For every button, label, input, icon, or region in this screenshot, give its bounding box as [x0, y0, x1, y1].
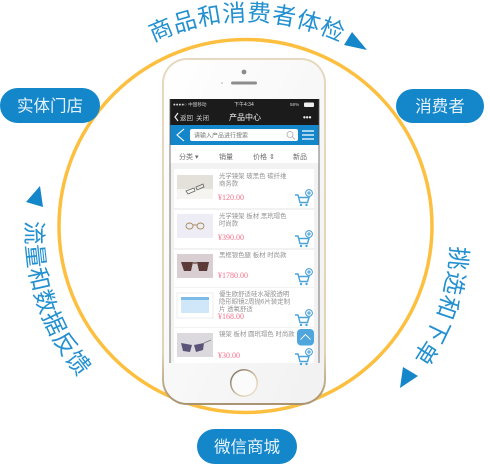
- scroll-to-top button: [297, 329, 314, 346]
- product 5: 镜架 板材 圆玳瑁色 时尚款: [219, 329, 295, 338]
- filter tabs: 销量: [219, 152, 233, 161]
- status bar and title bar: ●●●●○ 中国移动: [173, 101, 207, 108]
- status bar and title bar: 下午4:34: [234, 101, 254, 108]
- filter tabs: 价格 ⇕: [253, 152, 275, 161]
- product 2: 时尚款: [219, 218, 239, 228]
- status bar and title bar: 返回: [180, 114, 193, 122]
- product 4: 優生欧舒适硅水凝胶透明: [219, 289, 289, 298]
- product 4: 隐形眼镜2周抛6片装定制: [219, 296, 290, 306]
- curved heading: right: 挑选和下单: [415, 247, 470, 364]
- status bar and title bar: 58%: [290, 102, 299, 107]
- arrow: left: [26, 186, 43, 207]
- phone body: [162, 58, 326, 405]
- curved heading: left: 流量和数据反馈: [24, 222, 92, 376]
- product 4: ¥168.00: [218, 312, 244, 321]
- product 5: [174, 328, 314, 365]
- speaker: [221, 82, 257, 84]
- search bar: 请输入产品进行搜索: [194, 132, 248, 140]
- screen: [170, 99, 319, 365]
- pill: consumers: [396, 89, 484, 123]
- filter tabs: 分类 ▾: [179, 152, 199, 161]
- screen frame sides: [170, 99, 319, 363]
- product 1: 商务款: [219, 178, 239, 188]
- product 1: 光学镜架 玻黑色 碳纤维: [219, 171, 287, 180]
- yellow ring: [59, 40, 432, 412]
- camera: [242, 70, 246, 74]
- product 3: 黑框银色腿 板材 时尚款: [219, 250, 287, 259]
- pill: physical store: [0, 88, 100, 123]
- product 1: [174, 169, 314, 208]
- phone: [162, 58, 326, 405]
- product 4: [174, 288, 314, 327]
- product 2: [174, 210, 314, 248]
- product 5: ¥30.00: [218, 351, 240, 360]
- pill: WeChat store: 微信商城: [214, 438, 280, 456]
- status bar and title bar: [170, 99, 319, 125]
- status bar and title bar: •••: [303, 113, 312, 122]
- arrow: top: [344, 32, 367, 50]
- home button: [230, 369, 258, 397]
- arrow: right: [400, 367, 418, 388]
- pill: physical store: 实体门店: [17, 96, 83, 116]
- status bar and title bar: 产品中心: [229, 112, 261, 122]
- product 4: 片 透氧舒适: [219, 304, 253, 313]
- search bar: [170, 125, 319, 145]
- product 3: ¥1780.00: [218, 271, 248, 280]
- curved heading: top: 商品和消费者体检: [148, 1, 344, 43]
- product 2: ¥390.00: [218, 233, 244, 242]
- product 3: [174, 250, 314, 287]
- pill: consumers: 消费者: [415, 97, 465, 116]
- filter tabs: [170, 145, 319, 163]
- pill: WeChat store: [197, 429, 297, 464]
- product 2: 光学镜架 板材 黑玳瑁色: [219, 211, 287, 220]
- status bar and title bar: 关闭: [196, 113, 209, 122]
- filter tabs: 新品: [293, 152, 307, 161]
- product 1: ¥120.00: [218, 193, 244, 202]
